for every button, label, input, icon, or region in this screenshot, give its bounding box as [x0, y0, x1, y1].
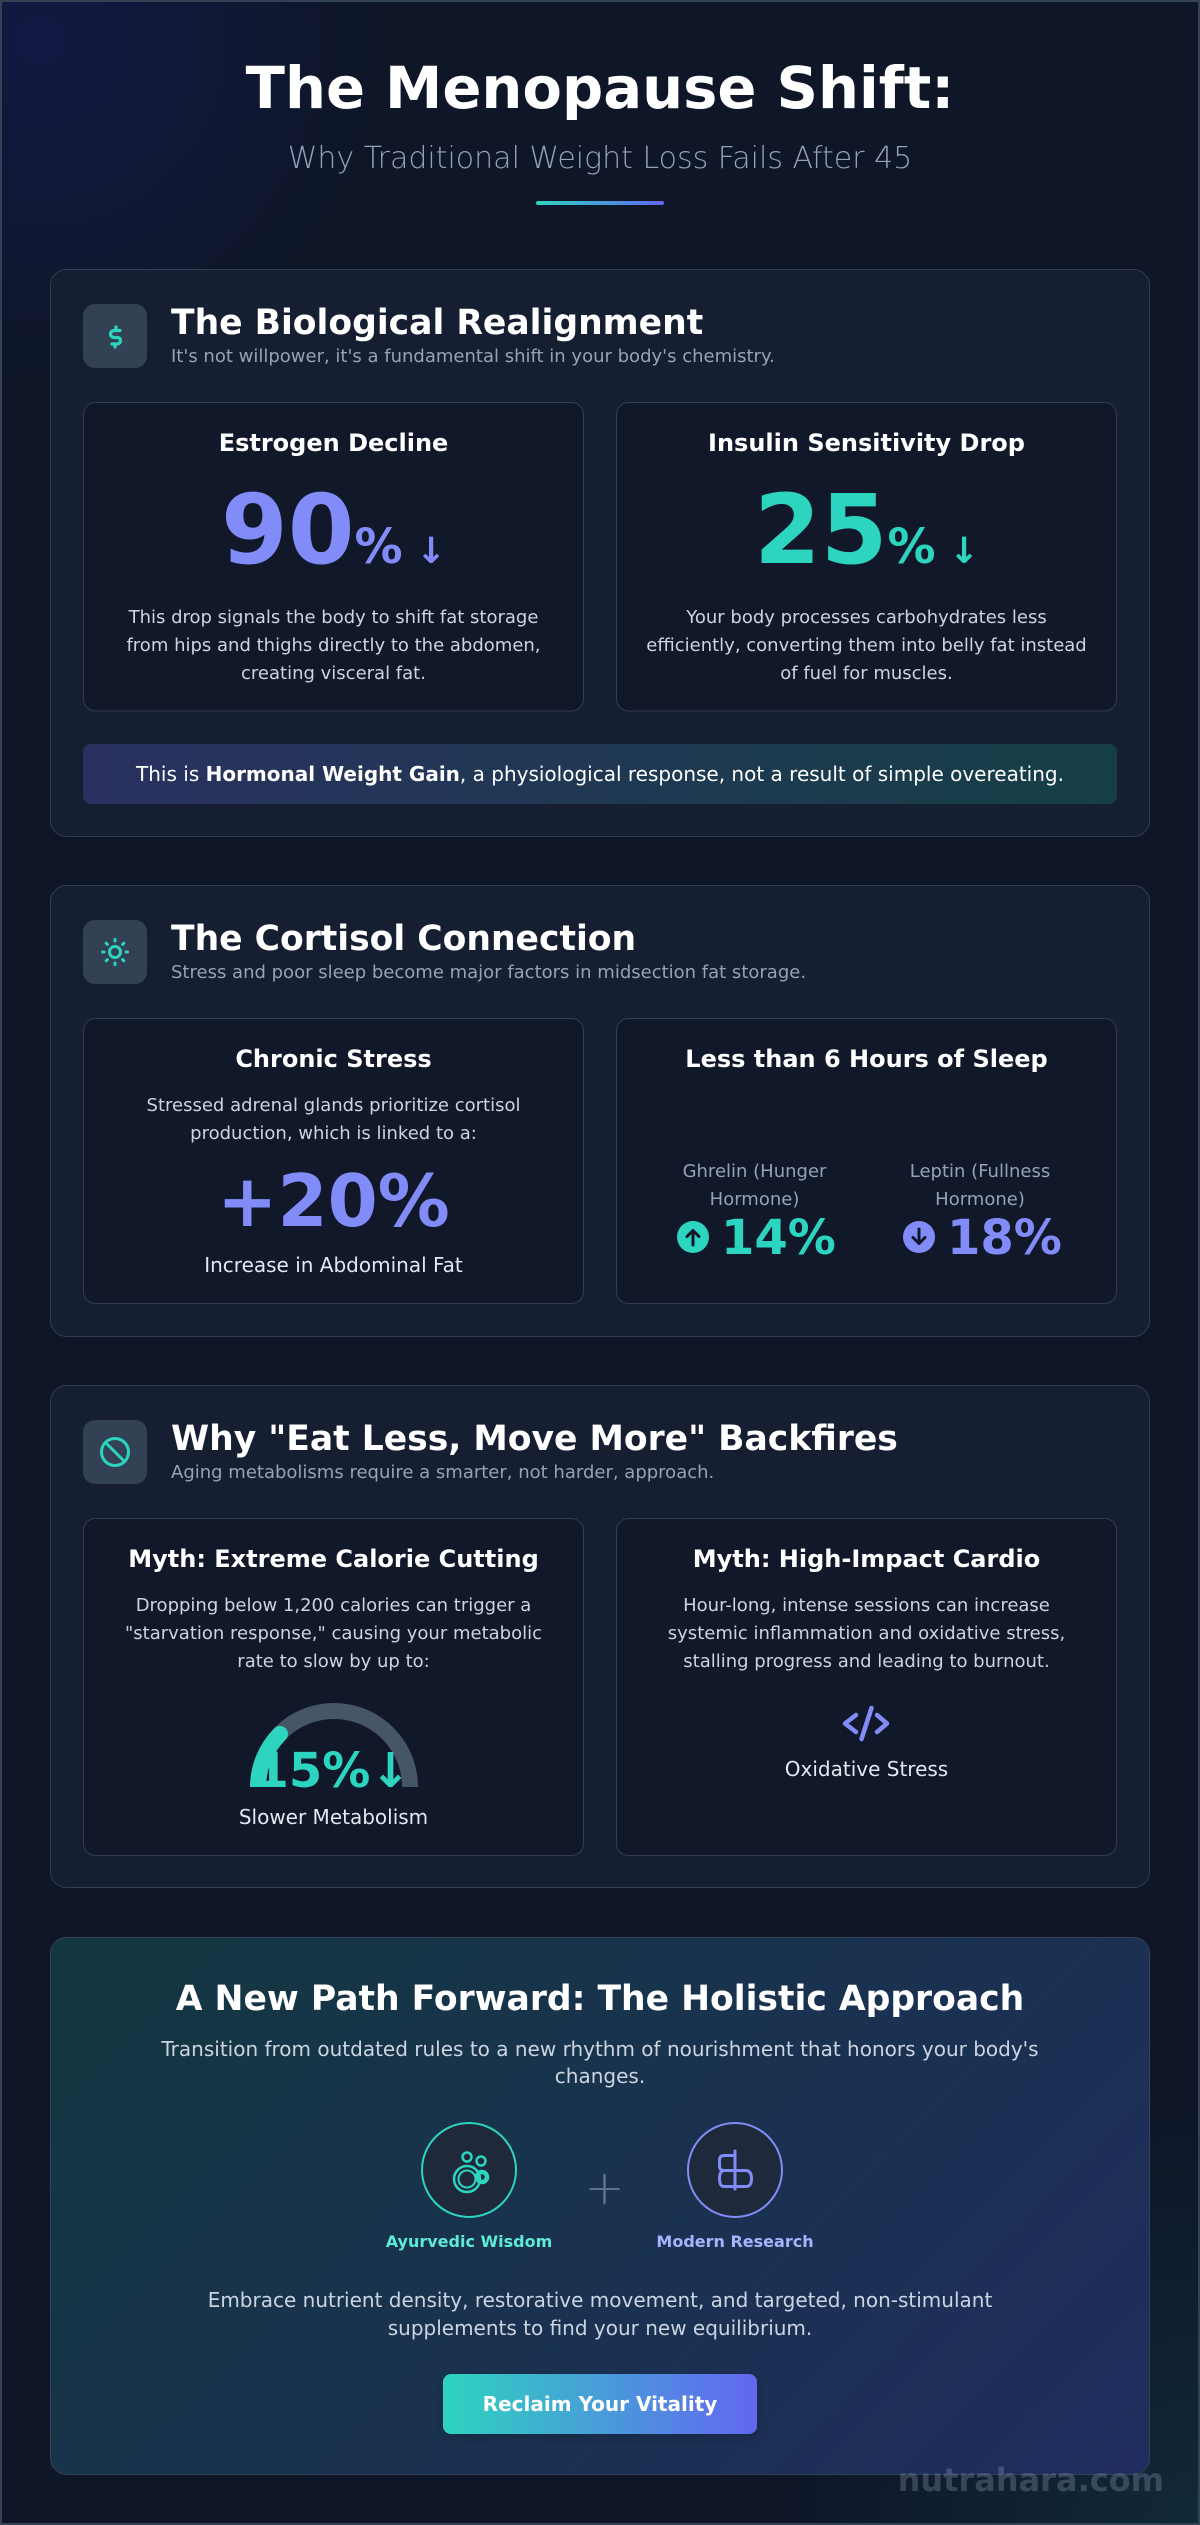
button [443, 2374, 757, 2434]
icon label: Modern Research [656, 2232, 814, 2251]
section subheading: Stress and poor sleep become major factors in midsection fat storage. [171, 962, 806, 983]
icon: arrow up circle [677, 1221, 709, 1253]
description: of fuel for muscles. [780, 663, 953, 684]
section subheading: Aging metabolisms require a smarter, not harder, approach. [171, 1462, 714, 1483]
card: calorie cutting [84, 1518, 584, 1856]
description: from hips and thighs directly to the abdomen, [126, 635, 541, 656]
panel: a new path forward [50, 1938, 1150, 2474]
section heading: The Biological Realignment [171, 303, 703, 343]
description: rate to slow by up to: [237, 1651, 430, 1672]
callout: hormonal weight gain [83, 744, 1117, 804]
description: systemic inflammation and oxidative stress, [668, 1623, 1065, 1644]
closing text [208, 2288, 992, 2340]
gauge: 15 percent [255, 1711, 411, 1799]
card title: Insulin Sensitivity Drop [708, 429, 1025, 457]
description: "starvation response," causing your metabolic [125, 1623, 542, 1644]
card title: Estrogen Decline [219, 429, 448, 457]
icon: ban [83, 1420, 147, 1484]
description [126, 607, 541, 684]
stat: ghrelin: Hormone) [710, 1189, 799, 1210]
stat: ghrelin: Ghrelin (Hunger [683, 1161, 827, 1182]
card title: Myth: Extreme Calorie Cutting [128, 1545, 539, 1573]
card: sleep [616, 1018, 1116, 1304]
accent bar [536, 201, 664, 205]
description [147, 1095, 520, 1144]
stat: leptin [903, 1161, 1062, 1266]
stat: 90 percent down: % [354, 519, 403, 575]
card: estrogen decline [84, 402, 584, 711]
closing text: supplements to find your new equilibrium. [388, 2316, 812, 2340]
description: efficiently, converting them into belly fat instead [646, 635, 1087, 656]
callout: hormonal weight gain: This is Hormonal Weight Gain, a physiological response, not a result of simple overeating. [135, 762, 1064, 786]
intro text: changes. [555, 2064, 645, 2088]
stat label: Slower Metabolism [239, 1805, 428, 1829]
description: stalling progress and leading to burnout. [683, 1651, 1050, 1672]
stat: 25 percent down: % [888, 519, 936, 575]
closing text: Embrace nutrient density, restorative movement, and targeted, non-stimulant [208, 2288, 992, 2312]
panel: cortisol connection [50, 886, 1150, 1336]
card title: Myth: High-Impact Cardio [693, 1545, 1040, 1573]
intro text [160, 2037, 1039, 2088]
description: creating visceral fat. [241, 663, 426, 684]
icon: modern research [688, 2123, 782, 2217]
header [246, 55, 954, 205]
description [125, 1595, 542, 1672]
title: The Menopause Shift: [246, 55, 954, 122]
subtitle: Why Traditional Weight Loss Fails After 45 [288, 141, 912, 176]
icon: dollar-like squiggle [83, 304, 147, 368]
description: Hour-long, intense sessions can increase [683, 1595, 1050, 1616]
stat label: Oxidative Stress [785, 1757, 948, 1781]
section heading: The Cortisol Connection [171, 919, 636, 959]
description: production, which is linked to a: [190, 1123, 477, 1144]
stat label: Increase in Abdominal Fat [204, 1253, 463, 1277]
intro text: Transition from outdated rules to a new rhythm of nourishment that honors your body's [160, 2037, 1039, 2061]
description: Stressed adrenal glands prioritize cortisol [147, 1095, 520, 1116]
icon: plus: + [584, 2160, 625, 2216]
stat: ghrelin: 14% [721, 1210, 836, 1266]
card: chronic stress [84, 1018, 584, 1304]
card: high-impact cardio [616, 1518, 1116, 1856]
panel: eat less move more [50, 1386, 1150, 1888]
icon: code brackets [845, 1708, 887, 1739]
stat: 25 percent down: ↓ [949, 531, 979, 572]
stat: ghrelin [677, 1161, 836, 1266]
icon: arrow down circle [903, 1221, 935, 1253]
section subheading: It's not willpower, it's a fundamental shift in your body's chemistry. [171, 346, 775, 367]
stat: 90 percent down: ↓ [416, 531, 446, 572]
description [646, 607, 1087, 684]
card title: Chronic Stress [235, 1045, 432, 1073]
stat: leptin: Hormone) [935, 1189, 1025, 1210]
icon: sun [83, 920, 147, 984]
section heading: Why "Eat Less, Move More" Backfires [171, 1419, 898, 1459]
description [668, 1595, 1065, 1672]
section heading: A New Path Forward: The Holistic Approach [176, 1979, 1024, 2019]
description: This drop signals the body to shift fat storage [128, 607, 538, 628]
description: Your body processes carbohydrates less [685, 607, 1047, 628]
icon: ayurvedic wisdom [422, 2123, 516, 2217]
stat: leptin: Leptin (Fullness [910, 1161, 1050, 1182]
card title: Less than 6 Hours of Sleep [685, 1045, 1048, 1073]
stat: leptin: 18% [947, 1210, 1062, 1266]
stat: plus 20 percent: +20% [217, 1159, 450, 1243]
card: insulin sensitivity drop [616, 402, 1116, 711]
panel: biological realignment [50, 270, 1150, 836]
button: Reclaim Your Vitality [483, 2392, 717, 2416]
stat: 90 percent down: 90 [221, 474, 355, 586]
watermark: nutrahara.com [898, 2461, 1164, 2499]
gauge: 15 percent: 15%↓ [255, 1743, 411, 1799]
icon label: Ayurvedic Wisdom [386, 2232, 552, 2251]
description: Dropping below 1,200 calories can trigger a [136, 1595, 531, 1616]
stat: 25 percent down: 25 [754, 474, 888, 586]
